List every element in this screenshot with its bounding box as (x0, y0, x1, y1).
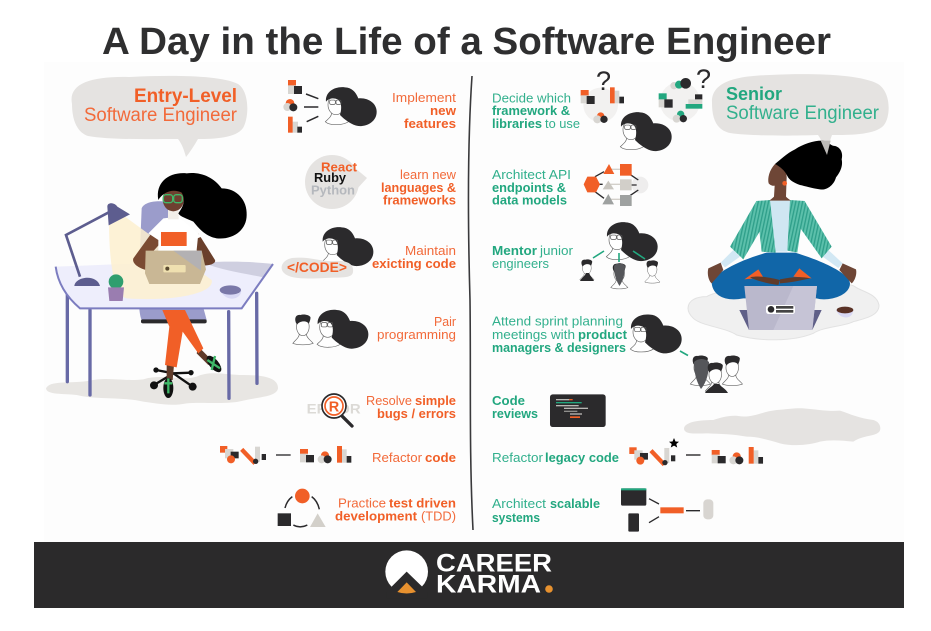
task: architect api: endpoints & (492, 180, 566, 195)
task: resolve bugs: bugs / errors (377, 406, 456, 421)
task: refactor legacy code: Refactor (492, 450, 544, 465)
task: decide framework: libraries (492, 116, 542, 131)
neck and head (768, 164, 791, 201)
laptop (145, 251, 206, 284)
icon: messy to clean shapes (220, 446, 351, 464)
ground shadow (46, 373, 278, 405)
task: mentor: Mentor (492, 243, 537, 258)
background panel (44, 62, 904, 542)
task: refactor code: code (425, 450, 456, 465)
laptop (739, 286, 822, 330)
center divider (468, 76, 473, 530)
desk legs (67, 293, 257, 398)
task: mentor (492, 222, 660, 289)
icon: magnifier over error: ERROR (307, 400, 361, 416)
shirt (769, 201, 791, 252)
task: refactor code (220, 446, 456, 465)
footer bar (34, 542, 904, 608)
task: pair programming: Pair (434, 314, 457, 329)
task: learn new languages (305, 155, 457, 209)
logo dot (545, 585, 553, 593)
task: sprint planning: product (578, 327, 628, 342)
task: decide framework: ? (596, 66, 611, 96)
task: decide framework (492, 64, 711, 151)
icon: shapes to head (283, 80, 318, 133)
career karma logo (385, 550, 553, 598)
career karma logo: CAREER (436, 550, 552, 578)
legs (712, 253, 850, 299)
task: test driven development: development (335, 508, 418, 524)
task: maintain existing code: Maintain (405, 243, 456, 258)
task: decide framework: ? (696, 64, 711, 94)
task: learn new languages: frameworks (383, 192, 456, 208)
icon: api diagram (584, 164, 648, 206)
task: resolve bugs (307, 393, 456, 426)
icon: magnifier over error (307, 394, 361, 426)
hands and cuffs (708, 250, 856, 283)
task: sprint planning: Attend sprint planning (492, 314, 623, 328)
desk top (56, 262, 273, 308)
task: resolve bugs: simple (415, 393, 456, 408)
speech bubble: entry-level (72, 76, 247, 157)
task: scalable systems: scalable (550, 496, 600, 511)
feet (744, 268, 812, 279)
hair (775, 141, 842, 190)
lamp (66, 212, 110, 286)
icon: code pill: </CODE> (287, 259, 347, 275)
speech bubble: entry-level: Software Engineer (84, 105, 238, 126)
speech bubble: senior: Senior (726, 84, 782, 104)
task: implement new features: new (430, 103, 457, 118)
lamp light (109, 217, 212, 299)
task: implement new features: features (404, 116, 456, 131)
icon: language bubble: Ruby (314, 170, 347, 185)
decorative cloud (684, 408, 880, 445)
title: A Day in the Life of a Software Engineer (102, 21, 831, 63)
task: pair programming: programming (377, 327, 456, 342)
icon: system diagram (621, 488, 713, 532)
icon: language bubble: React (321, 160, 358, 174)
lamp head (107, 203, 130, 225)
bubble tail tip (821, 141, 831, 155)
task: maintain existing code: exicting code (372, 256, 456, 271)
icon: language bubble: Python (311, 182, 355, 198)
task: learn new languages: languages & (381, 180, 456, 195)
icon: code editor (550, 394, 606, 427)
task: test driven development: (TDD) (421, 508, 456, 524)
coffee cup (220, 285, 241, 299)
cloud cushion (688, 283, 879, 340)
task: code reviews: reviews (492, 406, 538, 421)
task: architect api: Architect API (492, 167, 571, 182)
task: maintain existing code (282, 227, 456, 278)
task: architect api (492, 164, 648, 208)
task: architect api: data models (492, 192, 567, 208)
task: resolve bugs: Resolve (366, 393, 412, 408)
icon: code pill (282, 258, 353, 278)
chair (139, 201, 207, 391)
earring (782, 181, 787, 186)
task: test driven development: test driven (389, 496, 456, 510)
task: test driven development (278, 489, 456, 527)
task: mentor: engineers (492, 256, 549, 271)
task: decide framework: Decide which (492, 90, 571, 106)
task: sprint planning: managers & designers (492, 340, 626, 355)
logo mark (385, 550, 428, 598)
task: learn new languages: learn new (400, 167, 457, 182)
task: refactor code: Refactor (372, 450, 423, 465)
task: scalable systems: Architect (492, 496, 546, 511)
task: pair programming (293, 310, 457, 349)
icon: product team (690, 355, 742, 393)
task: test driven development: Practice (338, 496, 386, 510)
icon: tdd cycle (278, 489, 326, 527)
task: code reviews (492, 393, 606, 427)
icon: legacy refactor (629, 438, 763, 465)
coffee cup (836, 307, 853, 317)
person head (158, 173, 247, 239)
cactus (108, 274, 124, 301)
icon: language bubble (305, 155, 367, 209)
task: refactor legacy code: legacy code (545, 450, 619, 465)
task: implement new features: Implement (392, 90, 456, 105)
task: refactor legacy code (492, 438, 763, 465)
icon: magnifier over error: R (329, 400, 340, 416)
task: code reviews: Code (492, 393, 525, 408)
task: mentor: junior (539, 243, 574, 258)
person torso (133, 217, 215, 271)
speech bubble: entry-level: Entry-Level (134, 85, 237, 107)
illustration: senior engineer meditating (688, 141, 879, 340)
icon: framework options (581, 78, 702, 123)
illustration: entry-level engineer at desk (46, 173, 278, 405)
task: scalable systems: systems (492, 510, 540, 525)
task: implement new features (283, 80, 457, 133)
speech bubble: senior (712, 74, 889, 153)
icon: junior engineers (580, 251, 660, 289)
jacket (730, 200, 832, 259)
task: sprint planning (492, 314, 742, 393)
speech bubble: senior: Software Engineer (726, 103, 880, 124)
task: scalable systems (492, 488, 713, 532)
person legs (162, 310, 224, 398)
career karma logo: KARMA (436, 570, 541, 598)
task: decide framework: framework & (492, 103, 570, 118)
task: decide framework: to use (545, 116, 580, 131)
task: sprint planning: meetings with (492, 327, 575, 342)
